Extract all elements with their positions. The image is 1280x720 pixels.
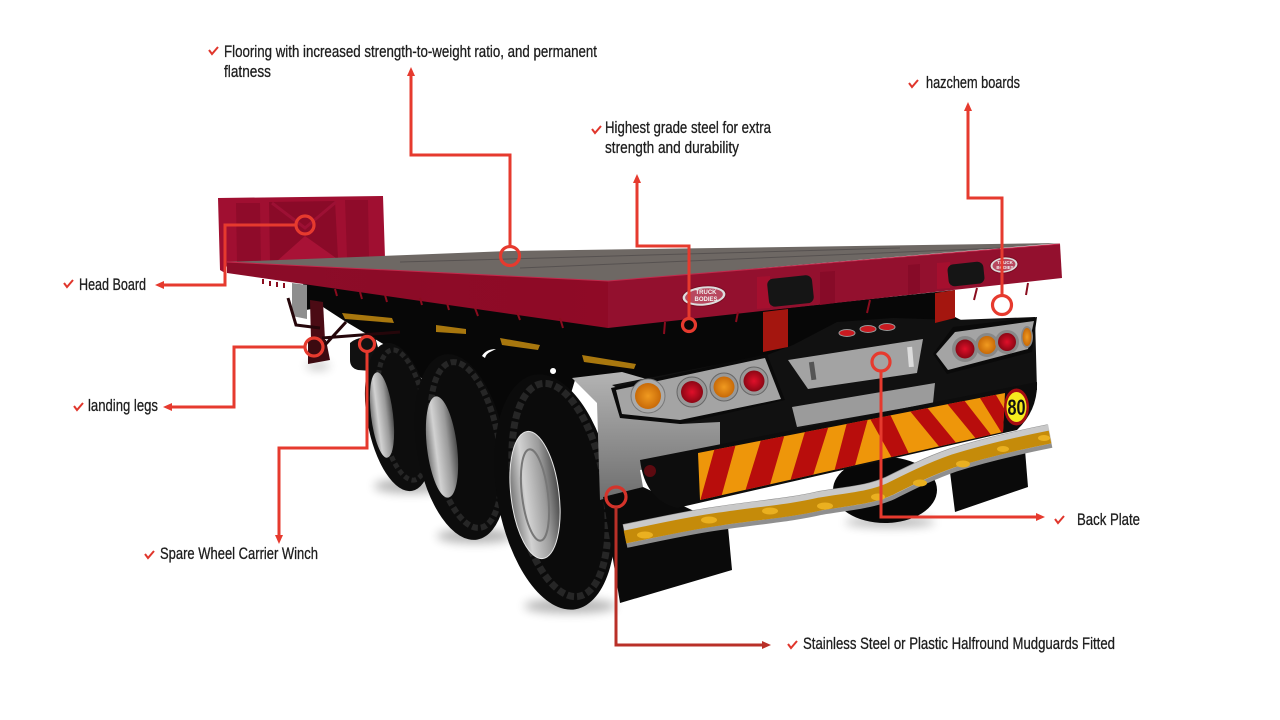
callout: highest grade steel [592, 118, 771, 332]
white chassis gaps [482, 349, 556, 374]
hanging hooks [263, 279, 1028, 334]
callout: mudguards [606, 487, 1115, 653]
callout: flooring: Flooring with increased strength-to-weight ratio, and permanent [224, 42, 597, 61]
speed limit sign: 80 [1008, 395, 1026, 420]
black rear frame [612, 317, 1037, 448]
badge 2: TRUCK [997, 260, 1014, 265]
marker lights [839, 324, 895, 336]
ground shadow [306, 363, 935, 613]
callout: highest grade steel: strength and durability [605, 138, 739, 157]
callout: mudguards: Stainless Steel or Plastic Halfround Mudguards Fitted [803, 634, 1115, 653]
callout: hazchem boards: hazchem boards [926, 73, 1020, 92]
back plate holder [640, 382, 1037, 508]
badge 2: BODIES [996, 265, 1014, 270]
callout: back plate [872, 353, 1140, 529]
roller 1 [757, 275, 814, 309]
head board [218, 196, 385, 273]
deck top [227, 243, 1060, 281]
rear tyre 3 [477, 365, 633, 619]
right light cluster [933, 317, 1037, 374]
landing legs [288, 283, 400, 364]
roller 2 [937, 261, 985, 289]
callout: back plate: Back Plate [1077, 510, 1140, 529]
rear tyre 2 [401, 347, 521, 547]
callout: head board [64, 216, 314, 294]
badge 1: BODIES [694, 297, 718, 303]
callout: highest grade steel: Highest grade steel for extra [605, 118, 771, 137]
rear tyre 1 [354, 338, 444, 496]
stainless mudguard [572, 372, 790, 500]
infographic canvas [63, 44, 1140, 653]
chassis underside [303, 283, 1000, 450]
deck side rail rear [608, 244, 1062, 328]
rail tabs [820, 264, 920, 305]
speed limit sign [1004, 388, 1029, 426]
lower metal plate [792, 383, 935, 427]
callout: flooring [209, 42, 597, 266]
left mudflap [603, 487, 732, 603]
rear axle hub [833, 457, 937, 523]
centre number plate holder [788, 339, 923, 389]
callout: flooring: flatness [224, 62, 271, 81]
deck edge highlight [227, 244, 1060, 281]
rear bumper bar [625, 434, 1050, 537]
bumper reflectors [637, 435, 1050, 538]
left light cluster [611, 354, 785, 424]
callout: landing legs: landing legs [88, 396, 158, 415]
badge 1: TRUCK [696, 290, 717, 296]
left tail reflector dot [644, 465, 656, 477]
callout: landing legs [74, 338, 323, 415]
yellow chassis strips [342, 313, 636, 369]
callout: spare wheel carrier winch [145, 336, 374, 563]
spare wheel [350, 337, 385, 372]
deck side rail left [227, 262, 608, 328]
right mudflap [950, 450, 1028, 512]
callout: head board: Head Board [79, 275, 146, 294]
callout: hazchem boards [909, 73, 1020, 314]
red support posts [763, 290, 955, 352]
badge 1 [681, 284, 727, 308]
badge 2 [989, 256, 1019, 274]
chevron reflective back plate [698, 393, 1005, 500]
callout: spare wheel carrier winch: Spare Wheel Carrier Winch [160, 544, 318, 563]
trailer illustration [218, 196, 1062, 619]
